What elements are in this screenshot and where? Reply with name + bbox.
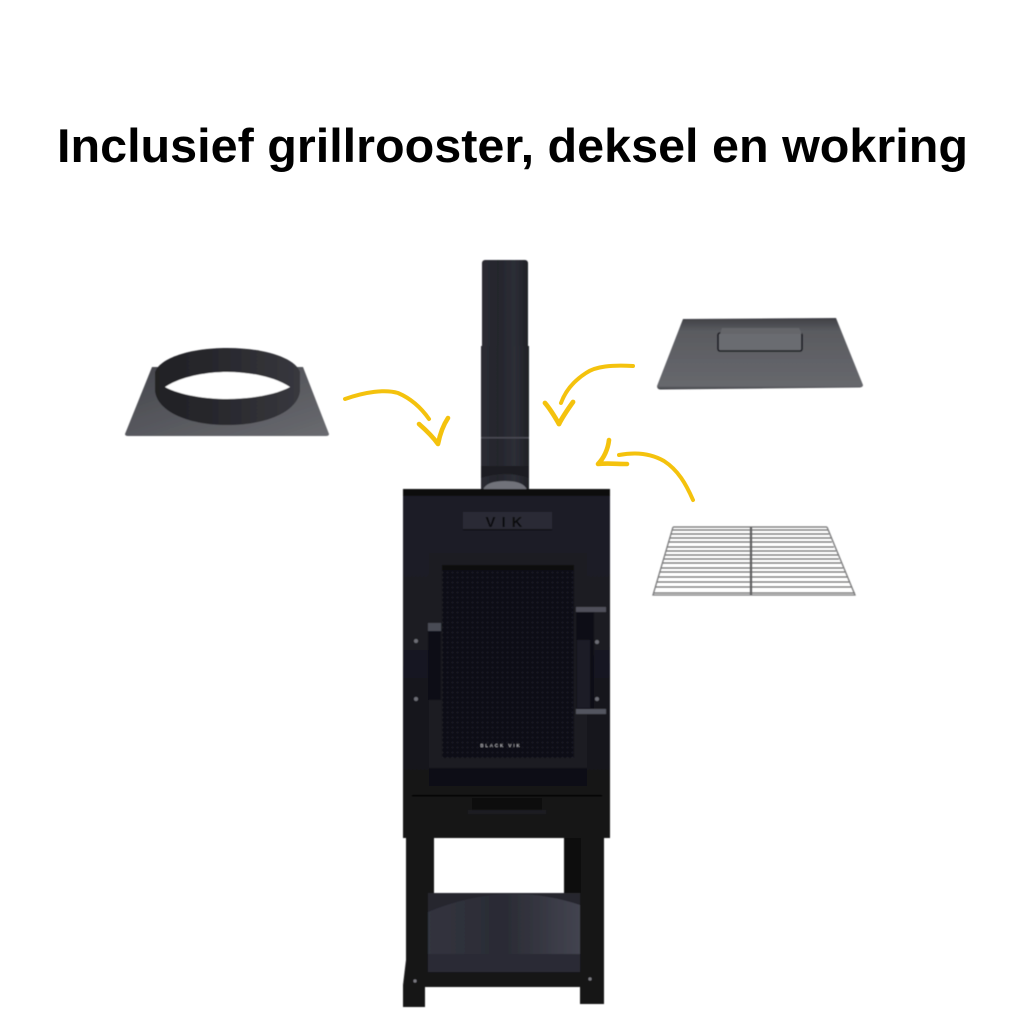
lid plate xyxy=(657,318,863,390)
wok ring accessory xyxy=(125,348,329,436)
chimney pipe xyxy=(481,260,529,490)
arrow: lid to stove xyxy=(545,366,633,424)
ring xyxy=(155,348,300,425)
lid handle xyxy=(718,328,802,351)
door frame xyxy=(429,553,587,770)
stove with chimney xyxy=(403,260,610,1007)
ring opening xyxy=(165,372,290,399)
lower rail xyxy=(425,972,581,987)
stand xyxy=(403,838,604,1007)
nameplate xyxy=(463,512,552,531)
right handle xyxy=(576,607,606,714)
stove body xyxy=(403,489,610,797)
hinge bolts xyxy=(414,639,599,701)
ash drawer xyxy=(403,795,610,838)
frame xyxy=(653,527,855,595)
square plate xyxy=(125,367,329,436)
left leg xyxy=(403,838,434,1007)
door mesh window xyxy=(442,565,574,758)
door text dots: BLACK VIK xyxy=(480,743,522,748)
grill rack accessory xyxy=(653,527,855,595)
lid accessory xyxy=(657,318,863,390)
right leg xyxy=(564,838,604,1004)
arrow: wok ring to stove xyxy=(345,391,448,444)
rods xyxy=(654,527,855,593)
nameplate: VIK xyxy=(485,514,529,531)
left handle xyxy=(428,623,441,700)
title: Inclusief grillrooster, deksel en wokring xyxy=(57,119,968,172)
arrow: grill rack to stove xyxy=(598,440,693,500)
shelf xyxy=(428,893,580,972)
